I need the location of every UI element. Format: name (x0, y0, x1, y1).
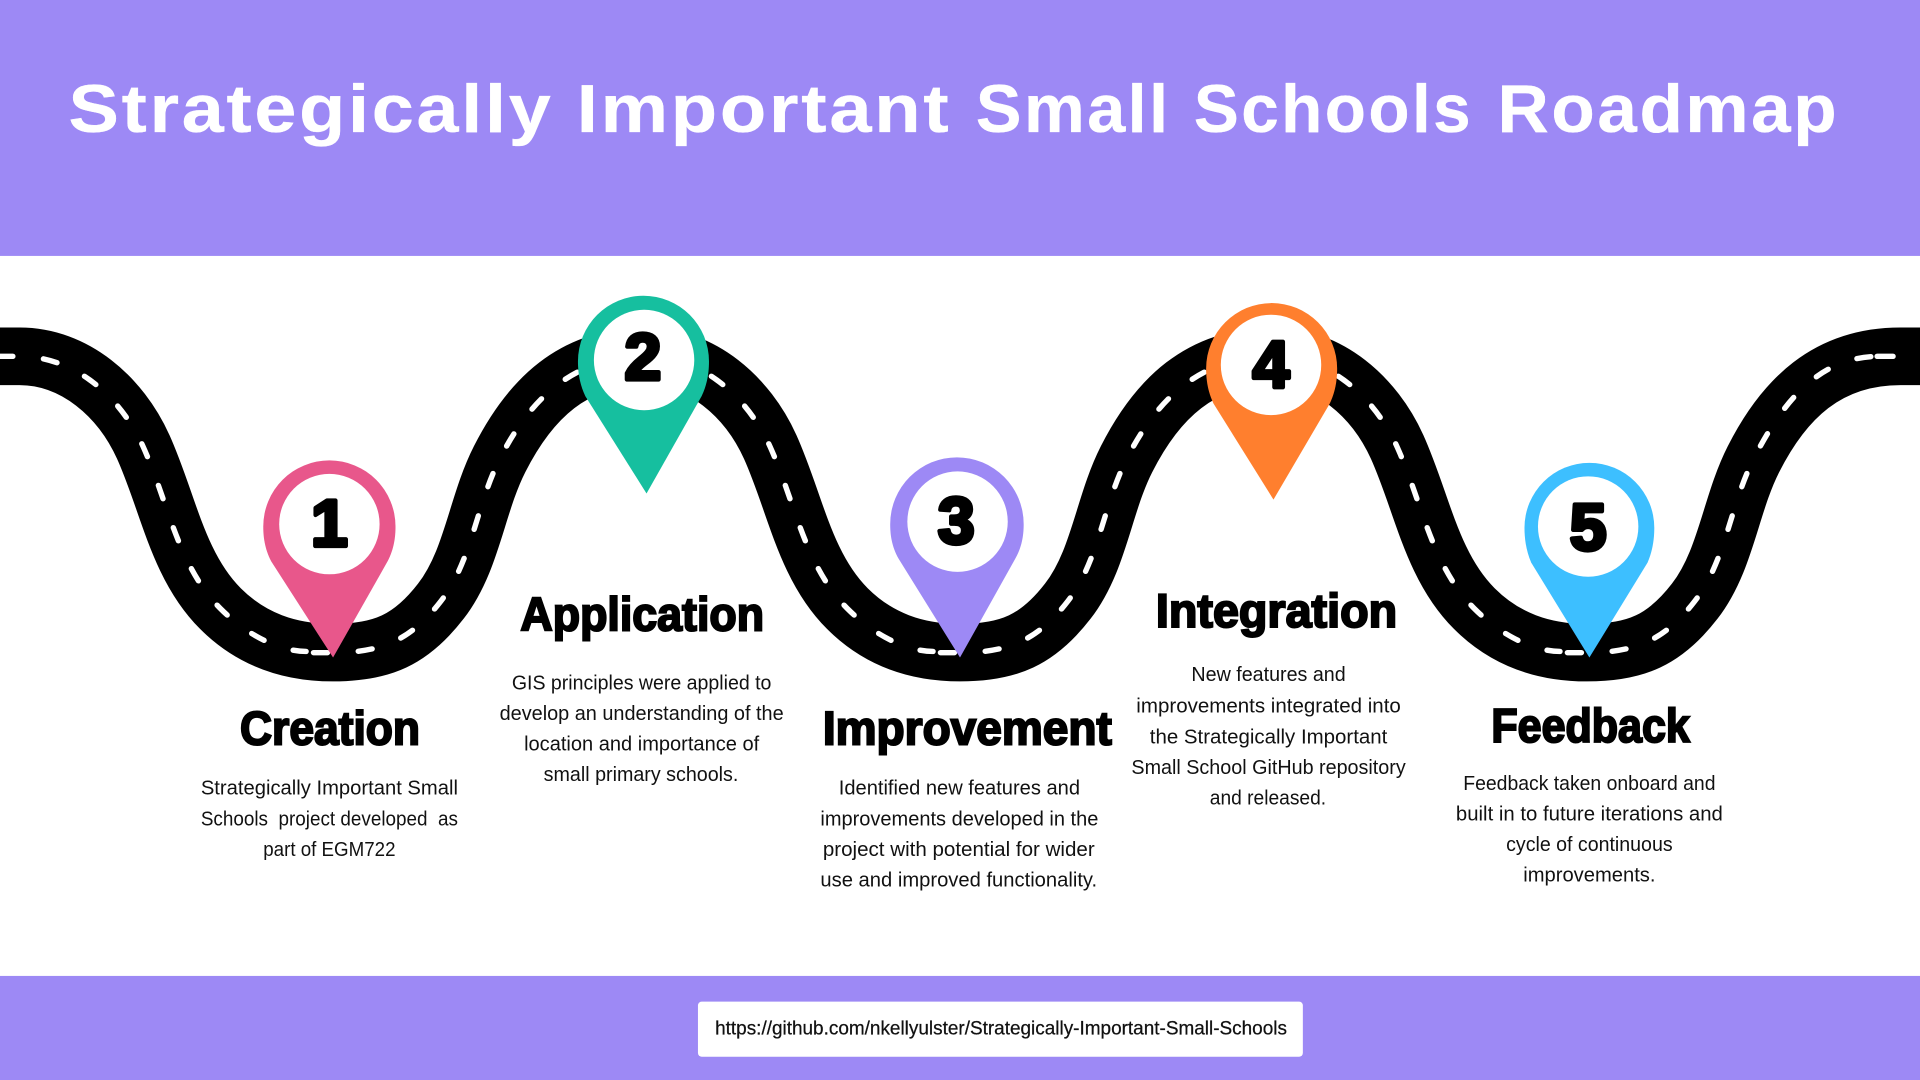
step: improvement (820, 701, 1112, 892)
text: application description: GIS principles were applied to (512, 672, 771, 694)
repository link box (698, 1002, 1303, 1057)
text: improvement description: improvements developed in the (820, 808, 1098, 830)
text: creation description: Schools project developed as (201, 808, 458, 830)
text: creation description: Strategically Important Small (201, 778, 458, 800)
text: improvement description: project with potential for wider (823, 839, 1095, 861)
header band (0, 0, 1920, 256)
step: integration (1131, 584, 1407, 809)
step: application (500, 588, 784, 786)
text: integration description: the Strategically Important (1150, 726, 1388, 748)
text: feedback description: improvements. (1523, 865, 1656, 887)
text: integration description: and released. (1210, 787, 1326, 809)
title: Schools (1194, 72, 1473, 147)
pin 3: 3 (938, 485, 975, 559)
step: creation (201, 701, 458, 861)
text: integration description (1131, 664, 1407, 809)
pin 2 (578, 296, 709, 493)
text: feedback description: built in to future iterations and (1456, 803, 1723, 825)
text: application description: develop an understanding of the (500, 703, 784, 725)
heading: improvement: Improvement (823, 701, 1112, 754)
text: application description: small primary schools. (544, 764, 738, 786)
title: Roadmap (1498, 72, 1839, 147)
footer band (0, 976, 1920, 1080)
text: improvement description: Identified new features and (839, 778, 1080, 800)
title (69, 72, 1839, 147)
repository link box: https://github.com/nkellyulster/Strategically-Important-Small-Schools (715, 1019, 1287, 1040)
text: feedback description: Feedback taken onboard and (1463, 773, 1716, 795)
pin 4 (1206, 303, 1337, 500)
text: application description: location and importance of (524, 734, 760, 756)
heading: integration: Integration (1156, 584, 1397, 637)
pin 4: 4 (1253, 328, 1290, 402)
text: creation description: part of EGM722 (263, 839, 396, 861)
text: creation description (201, 778, 458, 861)
title: Strategically (69, 72, 553, 147)
text: integration description: Small School GitHub repository (1131, 757, 1407, 779)
winding road (0, 356, 1920, 653)
text: feedback description (1456, 773, 1723, 887)
text: integration description: improvements integrated into (1136, 696, 1401, 718)
text: feedback description: cycle of continuous (1506, 834, 1673, 856)
step: feedback (1456, 699, 1723, 887)
pin 5 (1524, 463, 1654, 658)
text: integration description: New features and (1191, 664, 1346, 686)
pin 1: 1 (311, 487, 348, 561)
heading: application: Application (520, 588, 764, 641)
pin 2: 2 (624, 321, 661, 395)
pin 3 (890, 457, 1024, 658)
pin 1 (263, 460, 396, 658)
title: Important (577, 72, 951, 147)
heading: feedback: Feedback (1491, 699, 1691, 752)
text: improvement description: use and improved functionality. (820, 870, 1097, 892)
text: improvement description (820, 778, 1098, 892)
heading: creation: Creation (240, 701, 420, 754)
pin 5: 5 (1570, 491, 1607, 565)
title: Small (976, 72, 1171, 147)
text: application description (500, 672, 784, 786)
